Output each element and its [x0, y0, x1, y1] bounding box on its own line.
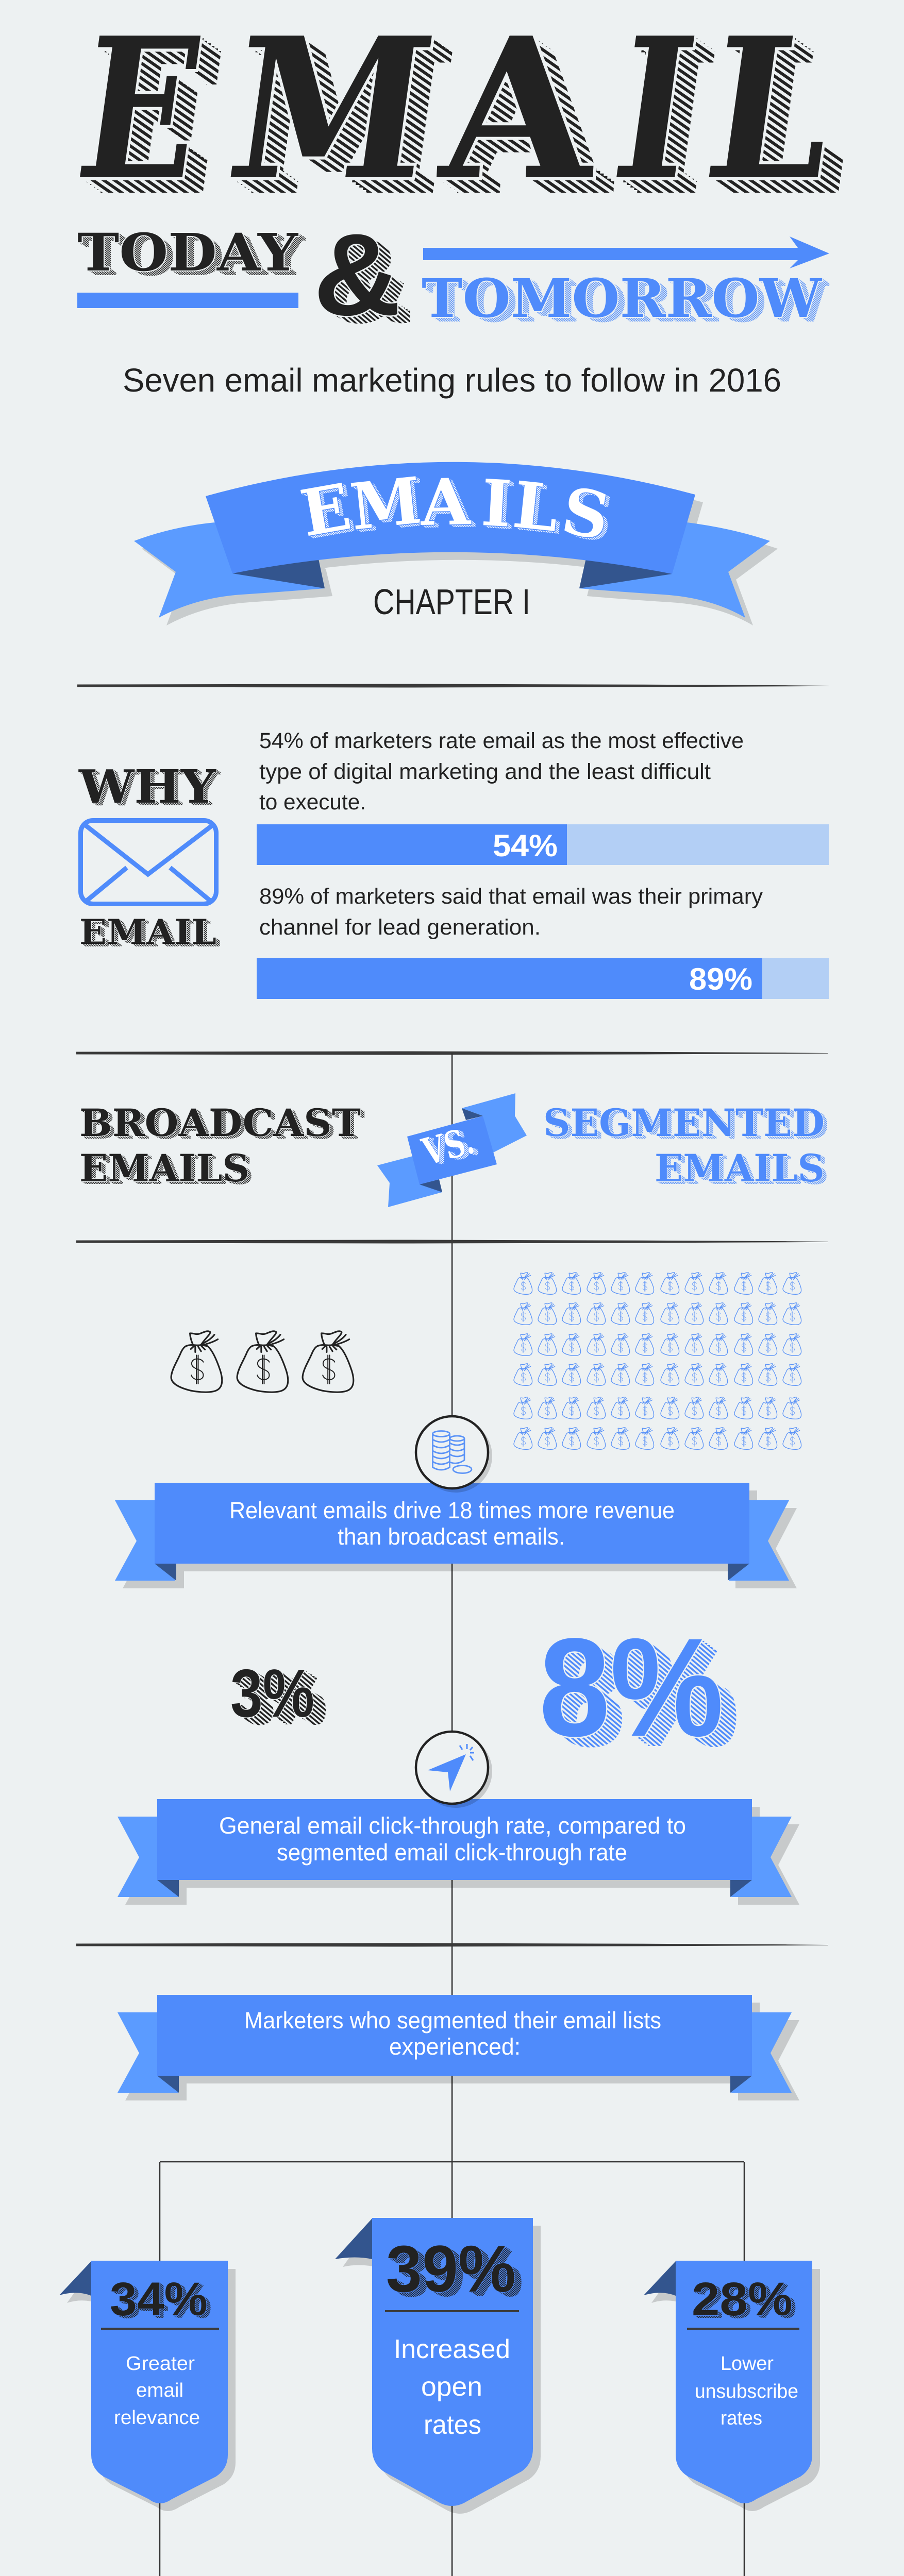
heading: TOMORROW: TOMORROW	[422, 267, 822, 330]
tag: 34%: email	[136, 2380, 183, 2401]
stat: 8%: 8%	[539, 1609, 724, 1766]
tag: 28%	[644, 2261, 820, 2511]
heading: SEGMENTED EMAILS: SEGMENTED	[543, 1101, 825, 1145]
ribbon: EMAILS chapter	[134, 462, 778, 625]
banner: click-through: segmented email click-through rate	[277, 1839, 627, 1866]
banner: relevant emails: than broadcast emails.	[338, 1523, 565, 1550]
tag: 28%: 28%	[692, 2273, 793, 2326]
stat text: 89%: channel for lead generation.	[259, 915, 541, 940]
bar chart: 54%: 54%	[493, 828, 558, 863]
heading: SEGMENTED EMAILS	[543, 1101, 825, 1191]
heading: EMAIL: EMAIL	[79, 912, 216, 952]
stat text: 89%	[259, 884, 763, 940]
tag: 28%: Lower	[721, 2353, 774, 2375]
title: EMAIL: I	[603, 0, 707, 224]
tag: 39%: 39%	[386, 2232, 516, 2306]
tag: 34%: 34%	[110, 2273, 208, 2326]
icon: coins in circle	[416, 1416, 492, 1493]
title: EMAIL: E	[66, 0, 215, 224]
heading: BROADCAST EMAILS: EMAILS	[79, 1146, 249, 1191]
ribbon: VS	[377, 1093, 527, 1207]
banner: marketers segmented	[118, 1995, 799, 2100]
heading: EMAIL: EMAIL	[79, 912, 216, 952]
heading: TODAY: TODAY	[77, 222, 299, 283]
ampersand: &	[313, 209, 401, 340]
stat: 3%: 3%	[230, 1655, 314, 1731]
bar chart: 89%: 89%	[689, 962, 752, 996]
title: EMAIL: E	[66, 0, 215, 224]
bar under TODAY	[77, 293, 298, 308]
stat: 3%: 3%	[230, 1655, 314, 1731]
ribbon: VS: VS.	[417, 1118, 479, 1174]
connector lines	[160, 2162, 744, 2576]
banner: click-through	[118, 1799, 799, 1905]
tag: 28%: 28%	[692, 2273, 793, 2326]
heading: WHY: WHY	[78, 759, 217, 814]
banner: relevant emails	[115, 1483, 797, 1588]
heading: SEGMENTED EMAILS: SEGMENTED	[543, 1101, 825, 1145]
subtitle: Seven email marketing rules to follow in 2016	[123, 362, 781, 399]
tag: 34%	[59, 2261, 236, 2511]
tag: 28%: rates	[721, 2408, 762, 2429]
ribbon: EMAILS chapter: EMAILS	[295, 463, 615, 555]
ampersand: &	[313, 209, 401, 340]
banner: marketers segmented: Marketers who segmented their email lists	[244, 2007, 661, 2033]
icon: cursor in circle	[416, 1732, 492, 1808]
stat text: 89%: 89% of marketers said that email was their primary	[259, 884, 763, 909]
title: EMAIL: A	[432, 0, 605, 223]
title: EMAIL: M	[217, 0, 446, 224]
heading: SEGMENTED EMAILS: EMAILS	[655, 1146, 825, 1191]
tag: 39%	[335, 2218, 541, 2514]
bar chart: 54%	[257, 824, 829, 865]
stat text: 54%: type of digital marketing and the least difficult	[259, 759, 711, 784]
tag: 28%: unsubscribe	[695, 2381, 798, 2402]
heading: BROADCAST EMAILS: BROADCAST	[79, 1101, 361, 1145]
heading: TOMORROW: TOMORROW	[422, 267, 822, 330]
tag: 39%: rates	[424, 2410, 481, 2440]
arrow	[423, 236, 829, 268]
banner: relevant emails: Relevant emails drive 18 times more revenue	[229, 1497, 675, 1523]
heading: BROADCAST EMAILS	[79, 1101, 361, 1191]
title: EMAIL: M	[217, 0, 446, 224]
title: EMAIL: L	[695, 0, 847, 224]
banner: marketers segmented: experienced:	[389, 2033, 521, 2060]
heading: TODAY: TODAY	[77, 222, 299, 283]
icon grid: segmented money bags	[514, 1273, 801, 1449]
title: EMAIL: I	[603, 0, 707, 224]
title: EMAIL: A	[432, 0, 605, 223]
tag: 34%: relevance	[114, 2407, 200, 2429]
ribbon: VS: VS.	[417, 1118, 479, 1174]
title: EMAIL	[80, 36, 843, 193]
title: EMAIL: L	[695, 0, 847, 224]
ribbon: EMAILS chapter: EMAILS	[295, 463, 615, 555]
stat text: 54%: 54% of marketers rate email as the most effective	[259, 728, 744, 753]
tag: 34%: 34%	[110, 2273, 208, 2326]
stat: 8%: 8%	[539, 1609, 724, 1766]
tag: 39%: open	[421, 2372, 482, 2402]
bar chart: 89%	[257, 958, 829, 999]
icon: three money bags	[171, 1331, 354, 1392]
heading: BROADCAST EMAILS: BROADCAST	[79, 1101, 361, 1145]
tag: 34%: Greater	[126, 2353, 195, 2375]
tag: 39%: Increased	[394, 2334, 510, 2364]
tag: 39%: 39%	[386, 2232, 516, 2306]
heading: TODAY	[78, 232, 306, 276]
heading: BROADCAST EMAILS: EMAILS	[79, 1146, 249, 1191]
icon: envelope	[80, 820, 216, 904]
stat text: 54%: to execute.	[259, 790, 366, 815]
heading: SEGMENTED EMAILS: EMAILS	[655, 1146, 825, 1191]
banner: click-through: General email click-through rate, compared to	[219, 1812, 686, 1839]
stat text: 54%	[259, 728, 744, 815]
chapter label: CHAPTER I	[373, 582, 530, 622]
ampersand	[319, 234, 410, 324]
heading: WHY: WHY	[78, 759, 217, 814]
